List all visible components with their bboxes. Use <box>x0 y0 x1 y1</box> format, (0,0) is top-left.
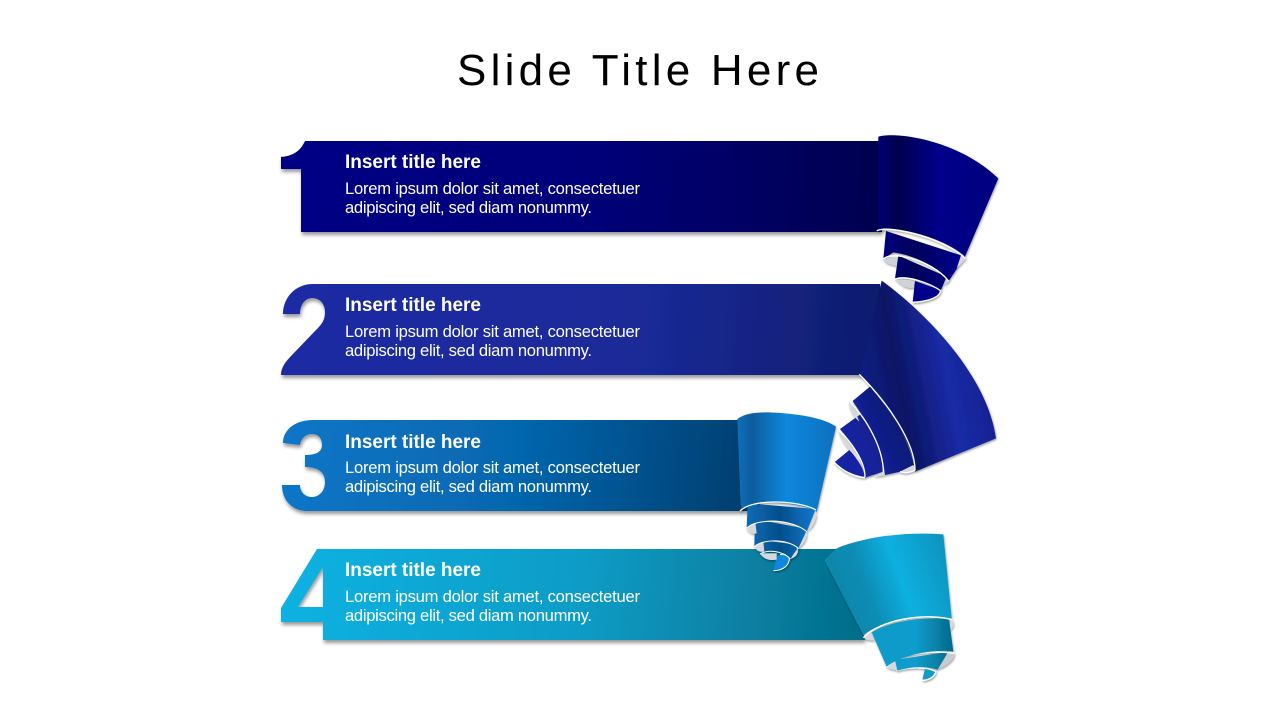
body text 3: adipiscing elit, sed diam nonummy. <box>345 477 592 496</box>
curl 2 <box>834 281 996 478</box>
body text 1: Lorem ipsum dolor sit amet, consectetuer <box>345 179 640 198</box>
number 4 bar <box>281 549 865 640</box>
heading 2: Insert title here <box>345 295 481 316</box>
panel: item 4 <box>281 549 865 640</box>
curl 3 <box>737 412 836 571</box>
body text 3: Lorem ipsum dolor sit amet, consectetuer <box>345 458 640 477</box>
body text 2: adipiscing elit, sed diam nonummy. <box>345 341 592 360</box>
curl 4 <box>824 534 954 680</box>
panel: item 2 <box>281 284 880 375</box>
body text 2 <box>345 322 640 360</box>
number 3 bar <box>282 420 760 511</box>
body text 2: Lorem ipsum dolor sit amet, consectetuer <box>345 322 640 341</box>
body text 1 <box>345 179 640 217</box>
body text 3 <box>345 458 640 496</box>
number 2 bar <box>281 284 880 375</box>
title: Slide Title Here <box>457 46 819 95</box>
heading 4: Insert title here <box>345 560 481 581</box>
heading 1: Insert title here <box>345 152 481 173</box>
number 1 bar <box>281 141 882 232</box>
heading 3: Insert title here <box>345 432 481 453</box>
panel: item 3 <box>282 420 760 511</box>
body text 4: Lorem ipsum dolor sit amet, consectetuer <box>345 587 640 606</box>
body text 4 <box>345 587 640 625</box>
curl 1 <box>877 135 998 302</box>
panel: item 1 <box>281 141 882 232</box>
body text 1: adipiscing elit, sed diam nonummy. <box>345 198 592 217</box>
body text 4: adipiscing elit, sed diam nonummy. <box>345 606 592 625</box>
